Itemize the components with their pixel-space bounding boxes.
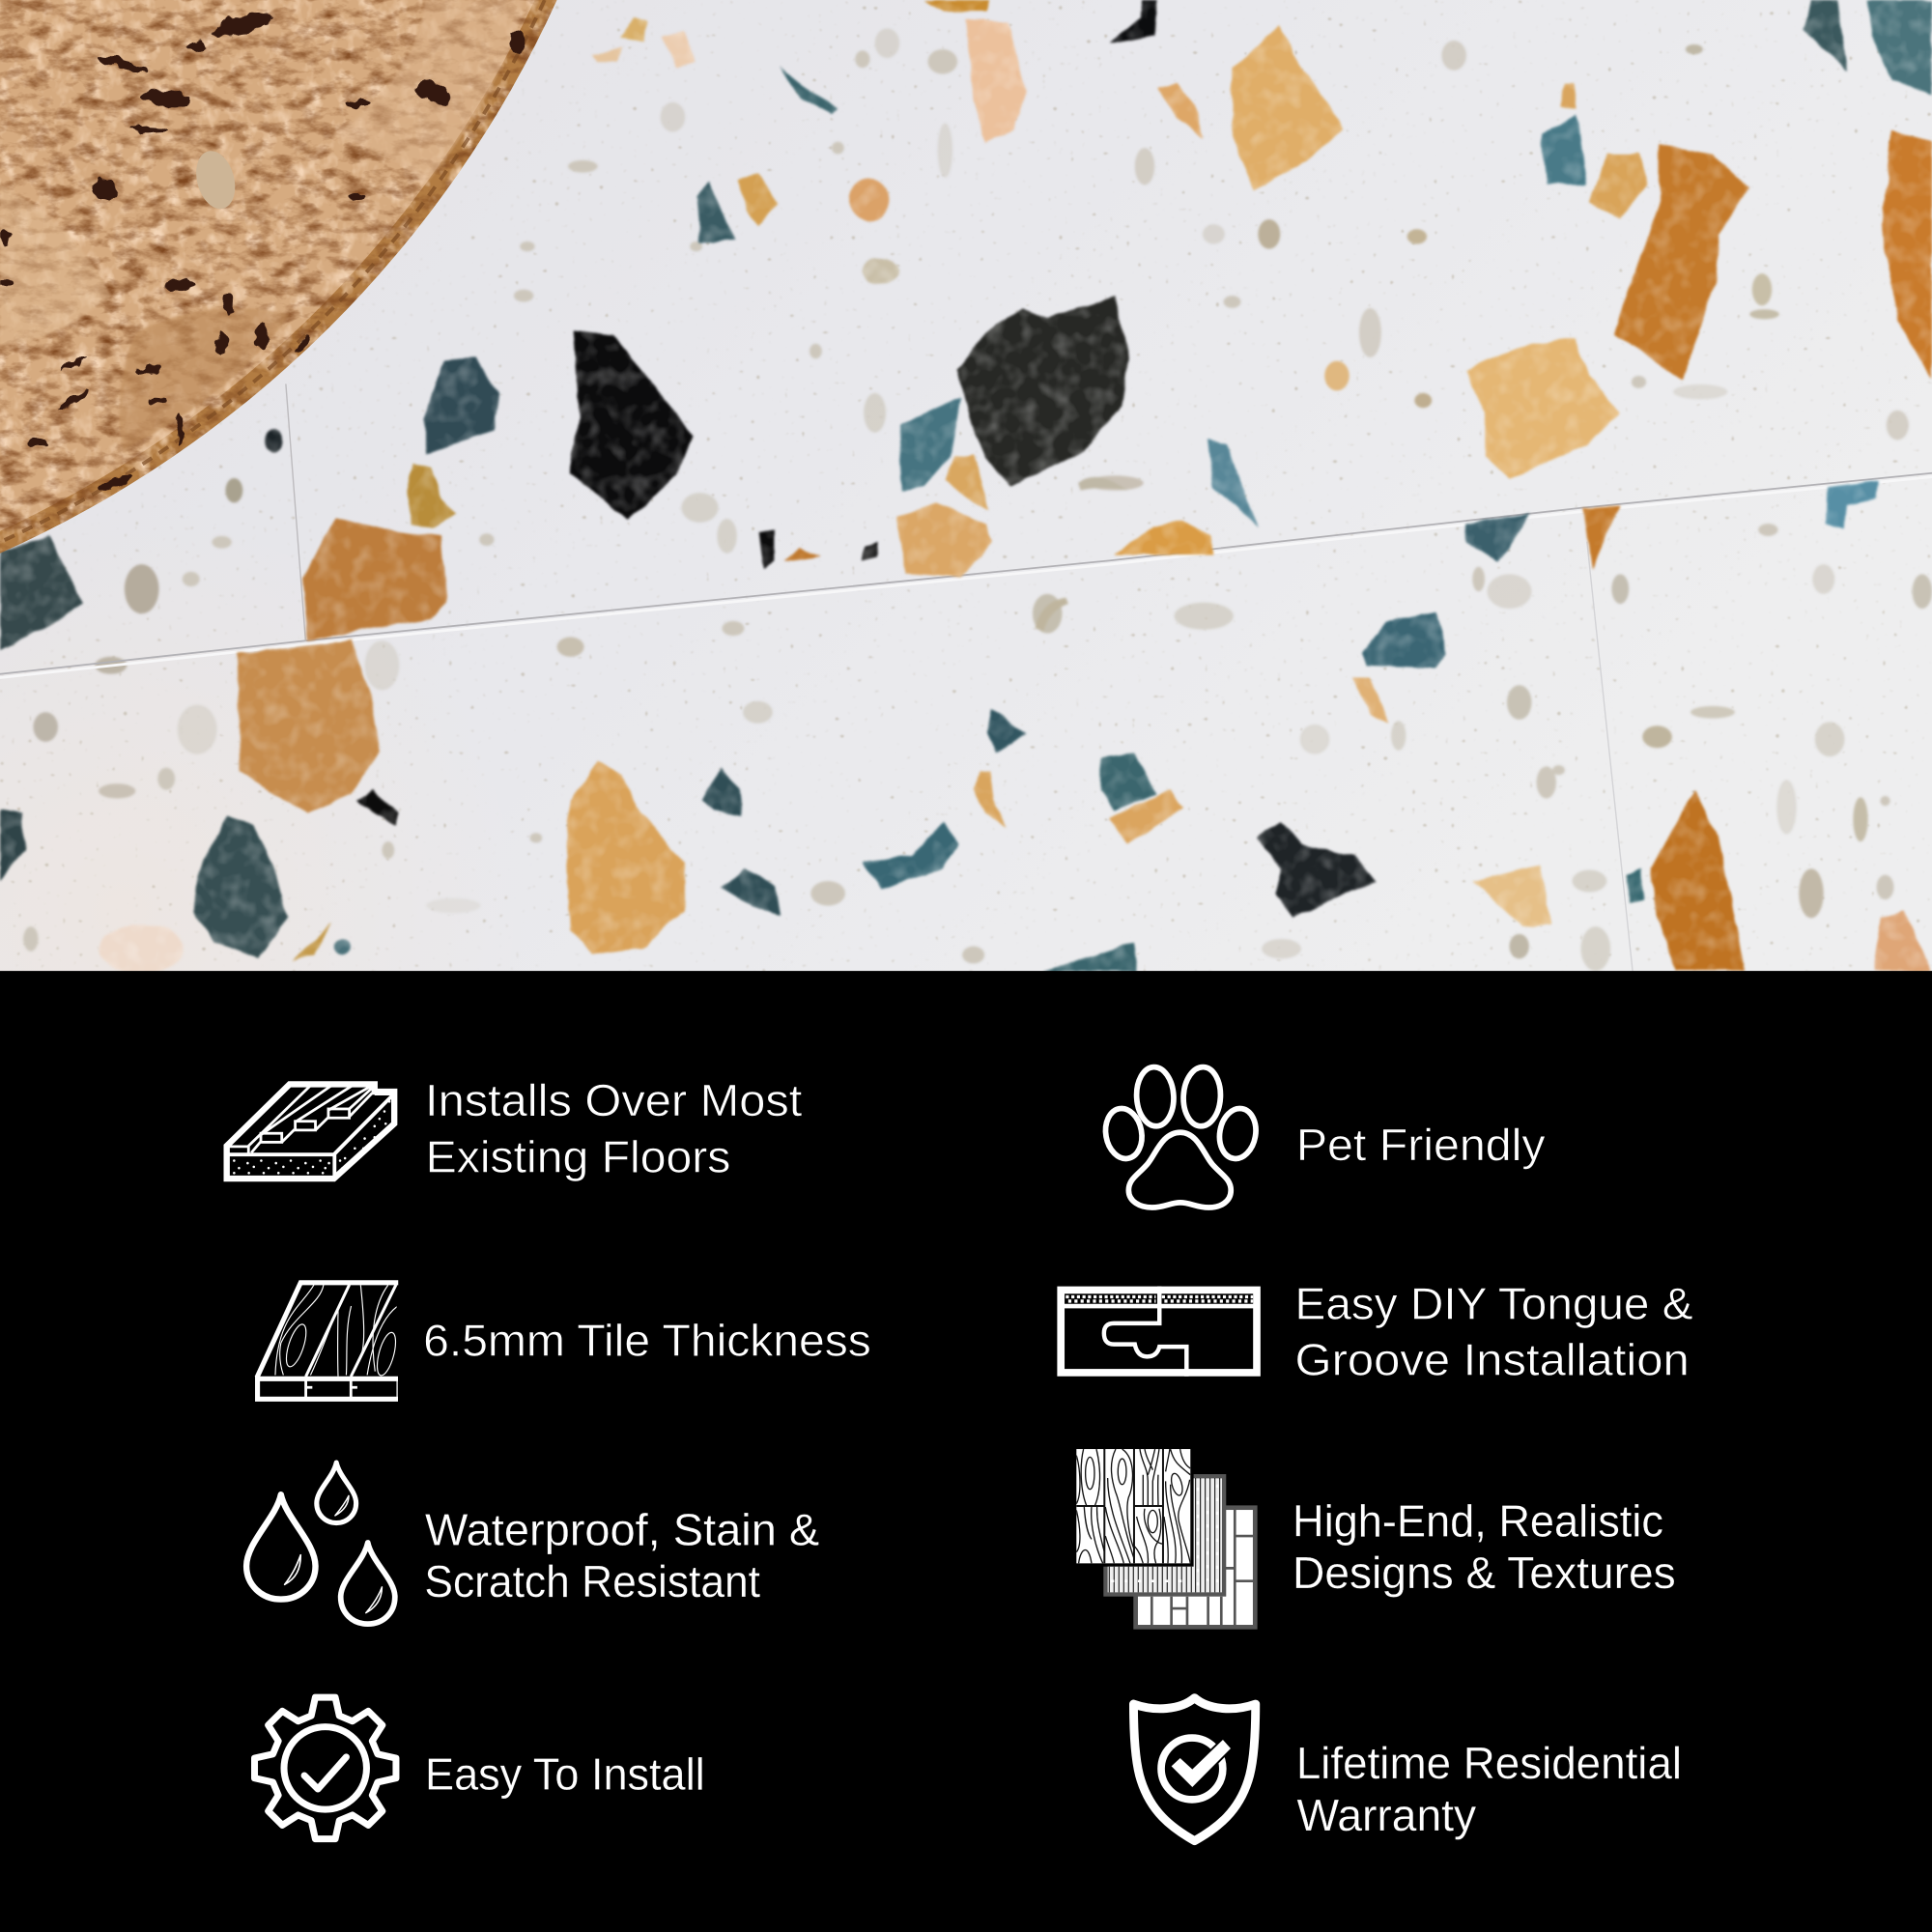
swatch: middle stripe pattern (1105, 1476, 1224, 1595)
icon: gear with check mark (255, 1697, 396, 1839)
text: 6.5mm Tile Thickness: 6.5mm Tile Thickness (423, 1316, 871, 1366)
text: Installs Over Most Existing Floors (425, 1075, 802, 1182)
feature: 6.5mm tile thickness (257, 1283, 871, 1400)
text: Easy To Install: Easy To Install (425, 1749, 705, 1800)
text: Waterproof, Stain & Scratch Resistant (424, 1504, 819, 1606)
icon: layered floor block (227, 1084, 394, 1179)
icon: shield with check mark (1133, 1698, 1256, 1841)
feature: easy DIY tongue and groove installation (1061, 1278, 1693, 1384)
text: Easy DIY Tongue & Groove Installation (1295, 1278, 1693, 1384)
text: Lifetime Residential Warranty: Lifetime Residential (1296, 1738, 1682, 1788)
text: Waterproof, Stain & Scratch Resistant: Waterproof, Stain & (425, 1504, 819, 1554)
text: Pet Friendly: Pet Friendly (1296, 1120, 1546, 1170)
swatch: front wood grain (1073, 1446, 1194, 1567)
feature: installs over most existing floors (227, 1075, 802, 1182)
text: Easy DIY Tongue & Groove Installation: Easy DIY Tongue & (1295, 1278, 1693, 1328)
terrazzo floor seams (0, 384, 1932, 971)
swatch: back tile pattern (1136, 1508, 1255, 1627)
icon: three water drops (246, 1463, 395, 1624)
cork coaster (0, 0, 567, 554)
text: Easy DIY Tongue & Groove Installation: Groove Installation (1295, 1334, 1690, 1384)
text: Waterproof, Stain & Scratch Resistant: Scratch Resistant (424, 1556, 760, 1606)
text: Lifetime Residential Warranty (1296, 1738, 1682, 1840)
icon: stacked texture swatches (1073, 1446, 1255, 1627)
text: High-End, Realistic Designs & Textures: Designs & Textures (1293, 1548, 1676, 1598)
feature: high-end realistic designs and textures (1073, 1446, 1676, 1627)
terrazzo coloured stones (0, 0, 1932, 974)
feature: waterproof, stain and scratch resistant (246, 1463, 819, 1624)
text: Lifetime Residential Warranty: Warranty (1296, 1790, 1477, 1840)
text: High-End, Realistic Designs & Textures (1293, 1496, 1676, 1598)
text: Installs Over Most Existing Floors: Installs Over Most (425, 1075, 802, 1125)
icon: wood plank cross-section (257, 1283, 399, 1400)
text: Installs Over Most Existing Floors: Existing Floors (426, 1132, 730, 1182)
icon: tongue and groove joint (1061, 1287, 1257, 1377)
text: High-End, Realistic Designs & Textures: High-End, Realistic (1293, 1496, 1663, 1547)
icon: paw print (1102, 1066, 1260, 1208)
feature: easy to install (255, 1697, 705, 1839)
feature: pet friendly (1102, 1066, 1546, 1208)
terrazzo small flecks (23, 28, 1932, 971)
terrazzo tiny specks (0, 0, 1932, 971)
photo: terrazzo floor with cork coaster (0, 0, 1932, 974)
feature: lifetime residential warranty (1133, 1698, 1682, 1841)
black features panel (0, 971, 1932, 1932)
